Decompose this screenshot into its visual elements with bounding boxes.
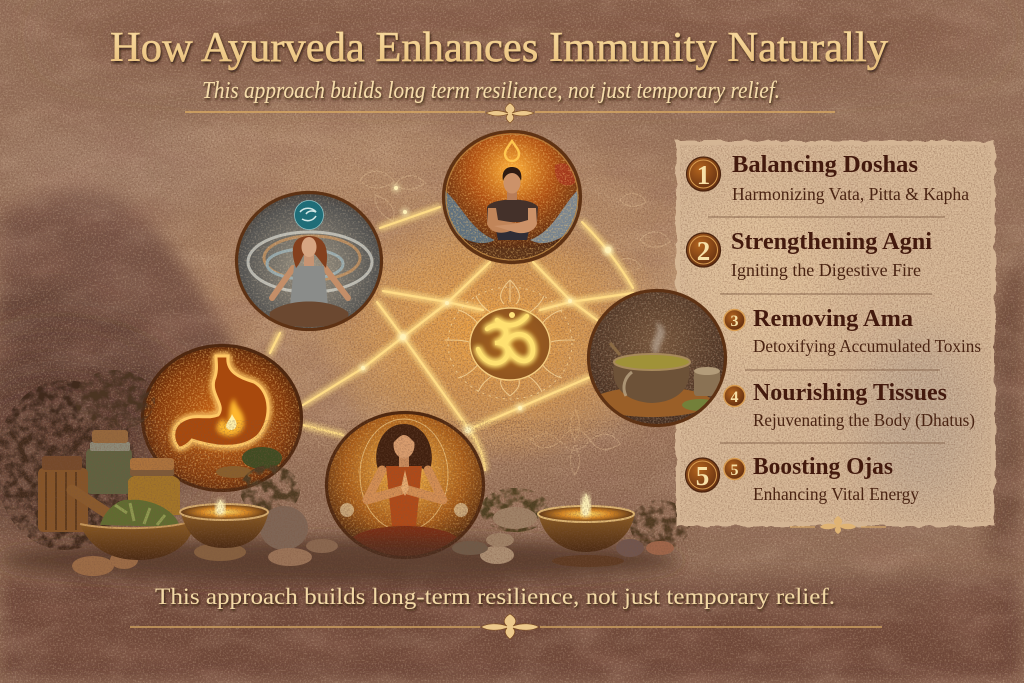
panel ornament [790, 516, 886, 534]
item 5: Boosting Ojas [686, 454, 919, 504]
oil lamp left [180, 499, 269, 548]
glow behind the central network [315, 205, 675, 465]
jar three [128, 458, 180, 515]
item 4: Nourishing Tissues: 4 [730, 389, 738, 406]
oil lamp right [538, 493, 635, 567]
item 3: Removing Ama: Removing Ama [753, 306, 913, 332]
foreground herbs, jars, lamps and stones [0, 370, 700, 582]
item 4: Nourishing Tissues [724, 380, 975, 431]
om symbol with mandala [445, 280, 575, 399]
title: How Ayurveda Enhances Immunity Naturally [110, 25, 888, 71]
item 1: Balancing Doshas: Harmonizing Vata, Pitta & Kapha [732, 184, 969, 204]
item 2: Strengthening Agni: Strengthening Agni [731, 229, 932, 255]
glowing network lines [270, 207, 633, 470]
parchment panel [676, 141, 995, 526]
item 5: Boosting Ojas: 5 [696, 461, 709, 491]
item 2: Strengthening Agni: 2 [697, 236, 710, 266]
item 4: Nourishing Tissues: Nourishing Tissues [753, 380, 947, 406]
medallion: herb cauldron [588, 290, 728, 426]
dark foliage [0, 370, 690, 550]
item 1: Balancing Doshas: 1 [697, 160, 710, 190]
item 5: Boosting Ojas: 5 [730, 462, 738, 479]
item 2: Strengthening Agni [686, 229, 932, 280]
item 3: Removing Ama: Detoxifying Accumulated Toxins [753, 336, 981, 356]
item 5: Boosting Ojas: Boosting Ojas [753, 454, 893, 480]
panel: five pathways list [676, 141, 995, 534]
item 3: Removing Ama: 3 [730, 313, 738, 330]
header ornament divider [185, 103, 835, 123]
item 5: Boosting Ojas: Enhancing Vital Energy [753, 484, 919, 504]
network sparkle nodes [361, 186, 611, 433]
subtitle: This approach builds long term resilience, not just temporary relief. [202, 78, 780, 104]
medallion: air-type meditating woman [235, 190, 385, 332]
jar one [38, 456, 88, 532]
item 1: Balancing Doshas: Balancing Doshas [732, 152, 918, 178]
foreground grain [0, 420, 700, 575]
medallion: glowing woman in prayer [325, 410, 485, 560]
item 2: Strengthening Agni: Igniting the Digestive Fire [731, 260, 921, 280]
ground shade [0, 538, 680, 582]
item 1: Balancing Doshas [686, 152, 969, 204]
jar two [86, 430, 132, 494]
faint leaf decorations [360, 171, 670, 475]
footer statement: This approach builds long-term resilience, not just temporary relief. [155, 584, 835, 609]
mortar and leaves [72, 490, 195, 560]
item 4: Nourishing Tissues: Rejuvenating the Body (Dhatus) [753, 410, 975, 431]
footer ornament divider [130, 614, 882, 639]
item 3: Removing Ama [724, 306, 981, 356]
ground stones [72, 506, 674, 576]
medallion: stomach with digestive fire [142, 345, 302, 493]
medallion: fire-type man (top) [440, 130, 585, 270]
